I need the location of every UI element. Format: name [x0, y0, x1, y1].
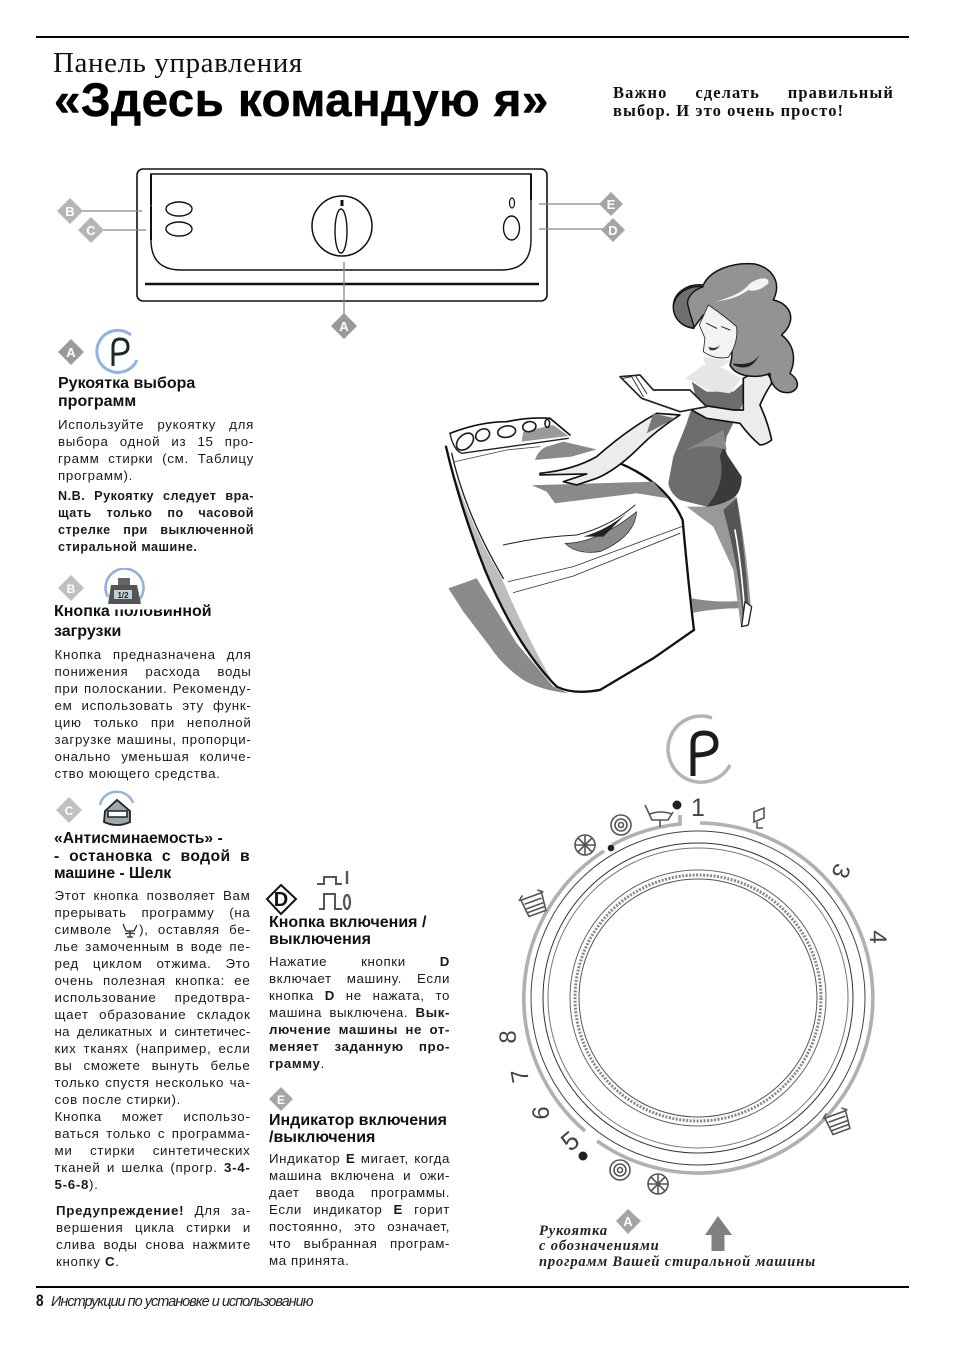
tagline [613, 83, 894, 120]
section E body: что выбранная програм- [269, 1236, 450, 1250]
section C body: ред циклом отжима. Это [54, 956, 250, 971]
section A note: стрелке при выключенной [58, 523, 254, 537]
dial numbers: 5 [555, 1125, 585, 1157]
callout E [599, 192, 623, 216]
section D heading [269, 914, 426, 948]
section A body: Используйте рукоятку для [58, 416, 254, 432]
footer text: Инструкции по установке и использованию [51, 1294, 313, 1310]
callout A and arrow [616, 1209, 732, 1251]
section B heading: загрузки [54, 623, 121, 640]
dial numbers: 1 [691, 794, 705, 822]
section C warning [56, 1202, 251, 1268]
section C body: только спустя несколько ча- [54, 1075, 250, 1090]
section B body: понижения расхода воды [54, 664, 252, 679]
section A note: щать только по часовой [58, 506, 254, 520]
section C body: лье замоченным в воде пе- [54, 939, 250, 954]
section C icons [56, 790, 134, 826]
section E heading: /выключения [269, 1129, 375, 1146]
callout A: A [339, 319, 349, 334]
section E icon: E [277, 1093, 285, 1107]
callout E: E [607, 197, 616, 212]
section D body: лючение машины не от- [269, 1022, 450, 1036]
section C body: щает образование складок [54, 1007, 250, 1022]
tagline: выбор. И это очень просто! [613, 101, 844, 120]
section C heading: «Антисминаемость» - [54, 830, 223, 847]
section E body: машина включена и ожи- [269, 1168, 450, 1182]
section A body [58, 416, 254, 482]
section B body: загрузке машины, пропорци- [54, 732, 252, 747]
section C warning: Предупреждение! Для за- [56, 1202, 251, 1218]
illustration: woman reading manual at washing machine [444, 262, 798, 694]
top rule [36, 36, 909, 38]
dial numbers: 3 [826, 860, 856, 882]
section E body: ма принята. [269, 1252, 349, 1268]
section A note: N.B. Рукоятку следует вра- [58, 489, 254, 503]
section D body: машина выключена. Вык- [269, 1004, 450, 1020]
P symbol [666, 714, 732, 784]
program dial [495, 794, 891, 1195]
section C body: символе ), оставляя бе- [54, 922, 250, 937]
section A heading [58, 375, 196, 410]
section A icons: A [66, 345, 76, 360]
section C body: тканей и шелка (прогр. 3-4- [54, 1160, 250, 1175]
section C heading: машине - Шелк [54, 865, 171, 882]
section B body: ство моющего средства. [54, 766, 221, 781]
section A body: программ). [58, 468, 133, 482]
section C icons: C [65, 804, 74, 818]
section C body: ми стирки синтетических [54, 1143, 250, 1158]
title: «Здесь командую я» [54, 74, 549, 127]
section D heading: Кнопка включения / [269, 914, 426, 930]
section E body: Если индикатор E горит [269, 1202, 450, 1216]
section B body: онально уменьшая количе- [54, 749, 252, 764]
callout D: D [608, 223, 618, 238]
section C warning: вершения цикла стирки и [56, 1220, 251, 1234]
section C body: 5-6-8). [54, 1177, 99, 1192]
section C heading [54, 830, 250, 882]
callout C [78, 217, 104, 243]
section A icons [58, 328, 138, 374]
section B body: ем использовать эту функ- [54, 698, 252, 713]
section E heading: Индикатор включения [269, 1112, 447, 1128]
section B body: при полоскании. Рекоменду- [54, 681, 252, 696]
section C body: ваться только с программа- [54, 1126, 250, 1141]
section B body: цию только при неполной [54, 715, 252, 730]
section A body: грамм стирки (см. Таблицу [58, 450, 254, 466]
outer arcs [524, 815, 873, 1173]
section A heading: Рукоятка выбора [58, 375, 195, 392]
section D heading: выключения [269, 931, 371, 948]
tagline: Важно сделать правильный [613, 83, 894, 102]
section E icon [269, 1087, 293, 1111]
subtitle: panel: Панель управления [53, 47, 303, 79]
section D body: кнопка D не нажата, то [269, 988, 450, 1002]
section B icons [58, 568, 179, 610]
section D body [269, 954, 450, 1070]
section D icons: D [274, 889, 288, 911]
section C body: очень полезная кнопка: ее [54, 973, 250, 988]
section A body: выбора одной из 15 про- [58, 434, 254, 448]
dial caption: Рукоятка с обозначениями программ Вашей стиральной машины [539, 1223, 816, 1270]
section A heading: программ [58, 393, 136, 410]
bottom rule [36, 1286, 909, 1288]
section E body: Индикатор E мигает, когда [269, 1150, 450, 1166]
control panel diagram [57, 168, 625, 339]
callout D [601, 218, 625, 242]
callout C: C [86, 223, 96, 238]
callout A and arrow: A [623, 1214, 633, 1229]
section C warning: кнопку C. [56, 1254, 120, 1268]
section A note [58, 489, 254, 554]
callout B: B [65, 204, 75, 219]
section E body: постоянно, это означает, [269, 1218, 450, 1234]
section C body [54, 888, 250, 1192]
dial icons [518, 805, 854, 1194]
dial numbers [495, 794, 891, 1157]
dial numbers: 8 [495, 1030, 522, 1044]
dial numbers: 7 [506, 1067, 535, 1085]
section E body: дает ввода программы. [269, 1184, 450, 1200]
section C body: сов после стирки). [54, 1092, 181, 1107]
callout A [331, 313, 357, 339]
section B icons: B [67, 582, 76, 596]
section B body: Кнопка предназначена для [54, 647, 252, 662]
section D icons [266, 871, 352, 916]
section C heading: - остановка с водой в [54, 848, 250, 864]
section A note: стиральной машине. [58, 540, 197, 554]
section B heading: Кнопка половинной [54, 603, 212, 620]
dial numbers: 6 [528, 1106, 555, 1120]
dial numbers: 4 [864, 930, 891, 944]
section D body: меняет заданную про- [269, 1038, 450, 1054]
section C warning: слива воды снова нажмите [56, 1236, 251, 1252]
section C body: вы сможете вынуть белье [54, 1058, 250, 1073]
section C body: прерывать программу (на [54, 905, 250, 920]
section B icons: 1/2 [117, 591, 129, 600]
section D body: Нажатие кнопки D [269, 954, 450, 968]
section C body: Этот кнопка позволяет Вам [54, 888, 250, 903]
section C body: Кнопка может использо- [54, 1109, 250, 1124]
section E body [269, 1150, 450, 1268]
section C body: ких тканях (например, если [54, 1041, 250, 1056]
section D body: включает машину. Если [269, 970, 450, 986]
page number: 8 [36, 1291, 44, 1310]
section C body: на деликатных и синтетичес- [54, 1024, 250, 1039]
section B heading [54, 603, 212, 640]
section B body [54, 647, 252, 781]
section D body: грамму. [269, 1056, 325, 1070]
section E heading [269, 1112, 447, 1146]
section C body: использование предотвра- [54, 990, 250, 1005]
callout B [57, 198, 83, 224]
dial dots [578, 800, 682, 1160]
